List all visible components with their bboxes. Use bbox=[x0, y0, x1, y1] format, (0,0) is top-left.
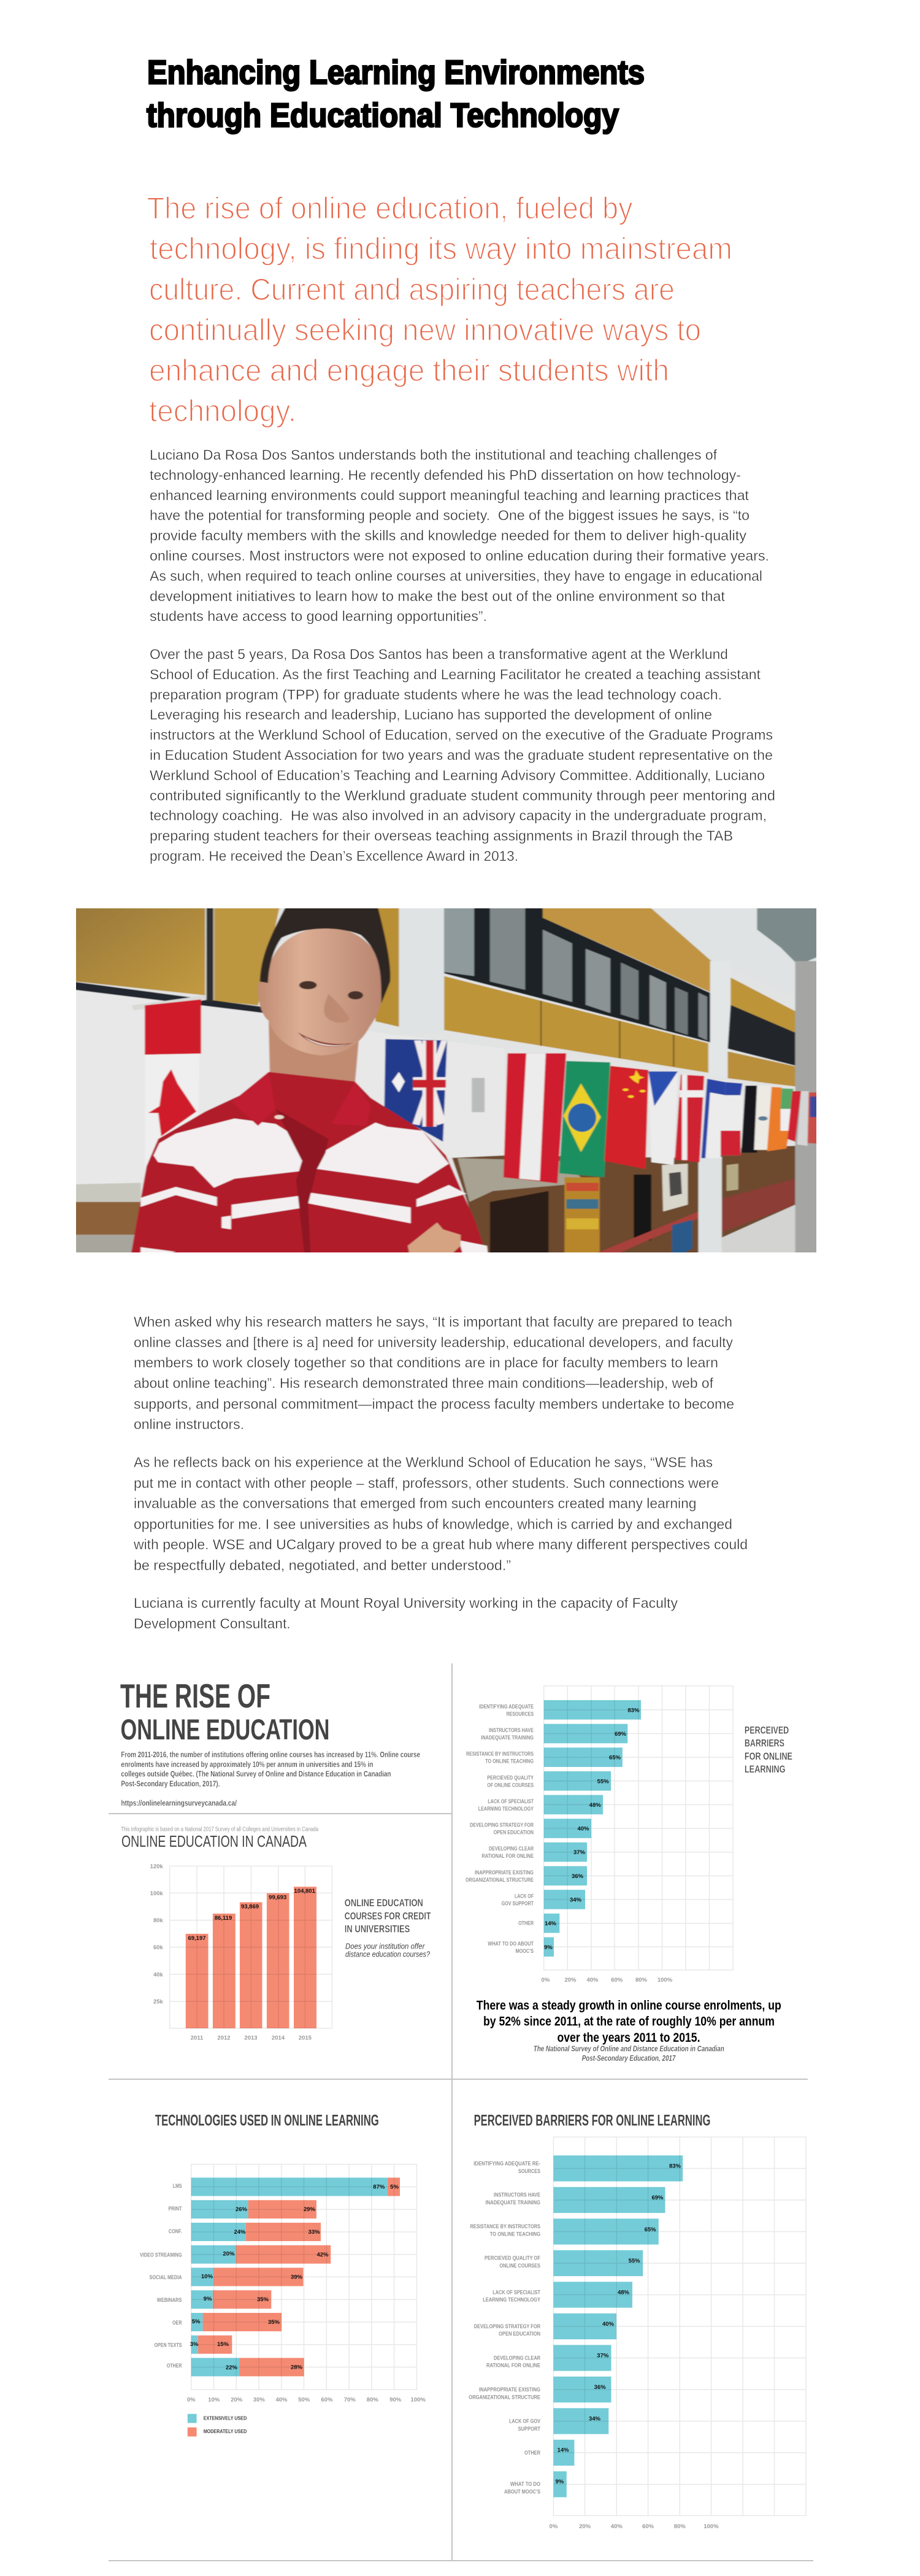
stacked bar chart: technologies: LMS bbox=[173, 2183, 182, 2189]
bar chart: perceived barriers: MOOC’S bbox=[515, 1948, 534, 1954]
body paragraph: why research matters: supports, and personal commitment—impact the process faculty members undertake to become bbox=[134, 1396, 734, 1412]
stacked bar chart: technologies: 20% bbox=[231, 2396, 243, 2403]
stacked bar chart: technologies: 70% bbox=[344, 2396, 356, 2403]
bar chart: perceived barriers: 14% bbox=[545, 1920, 557, 1927]
stacked bar chart: technologies: 26% bbox=[236, 2206, 248, 2213]
bar chart: perceived barriers detail: 65% bbox=[645, 2226, 656, 2233]
panel: perceived barriers for online learning bbox=[469, 2112, 806, 2530]
panel: technologies used in online learning bbox=[140, 2112, 426, 2436]
body paragraph: past five years: School of Education. As the first Teaching and Learning Facilitator he created a teaching assistant bbox=[150, 666, 761, 682]
bar chart: perceived barriers detail: INADEQUATE TRAINING bbox=[486, 2199, 540, 2206]
man: shirt bbox=[130, 1072, 488, 1259]
bar chart: courses by year bbox=[150, 1863, 332, 2042]
bar chart: courses by year: 86,119 bbox=[215, 1915, 232, 1922]
bar chart: perceived barriers: 60% bbox=[611, 1977, 623, 1984]
lede paragraph: The rise of online education, fueled by bbox=[147, 191, 633, 226]
flag: China bbox=[604, 1066, 648, 1169]
bar chart: perceived barriers detail: 36% bbox=[594, 2384, 606, 2391]
body paragraph: why research matters: online classes and [there is a] need for university leadership, educational developers, and faculty bbox=[134, 1335, 733, 1351]
bar chart: perceived barriers: 36% bbox=[572, 1873, 584, 1880]
bar chart: perceived barriers: TO ONLINE TEACHING bbox=[485, 1758, 534, 1765]
man: neck bbox=[269, 1021, 359, 1147]
bar chart: perceived barriers: LACK OF bbox=[515, 1893, 534, 1899]
body paragraph: reflections: put me in contact with other people – staff, professors, other students. Such connections were bbox=[134, 1475, 719, 1491]
bar chart: courses by year: 93,869 bbox=[241, 1904, 259, 1910]
body paragraph: past five years: Over the past 5 years, Da Rosa Dos Santos has been a transformative agent at the Werklund bbox=[150, 646, 728, 662]
bar chart: perceived barriers detail: 34% bbox=[589, 2415, 601, 2422]
stacked bar chart: technologies: 9% bbox=[204, 2296, 212, 2302]
chart caption: BARRIERS bbox=[745, 1738, 784, 1749]
body paragraph: why research matters: When asked why his research matters he says, “It is important that faculty are prepared to teach bbox=[134, 1314, 732, 1330]
bar chart: perceived barriers: 100% bbox=[657, 1977, 673, 1984]
bar chart: courses by year: 2014 bbox=[272, 2035, 285, 2042]
body paragraph: past five years: instructors at the Werklund School of Education, served on the executive of the Graduate Programs bbox=[150, 727, 773, 743]
infographic intro text: https://onlinelearningsurveycanada.ca/ bbox=[121, 1799, 237, 1807]
bar chart: perceived barriers detail: RATIONAL FOR ONLINE bbox=[486, 2363, 540, 2369]
flag: dark bbox=[741, 1086, 760, 1152]
stacked bar chart: technologies: 50% bbox=[298, 2396, 310, 2403]
callout: enrolment growth: over the years 2011 to 2015. bbox=[557, 2031, 700, 2045]
bar chart: perceived barriers: IDENTIFYING ADEQUATE bbox=[479, 1703, 534, 1709]
body paragraph: introduction: provide faculty members with the skills and knowledge needed for them to deliver high-quality bbox=[150, 527, 747, 543]
bar chart: perceived barriers detail: RESISTANCE BY INSTRUCTORS bbox=[470, 2223, 540, 2229]
bar chart: courses by year: 100k bbox=[150, 1890, 164, 1897]
chart note: This infographic is based on a National 2017 Survey of all Colleges and Universities in Canada bbox=[121, 1826, 318, 1833]
chart caption: COURSES FOR CREDIT bbox=[345, 1910, 431, 1922]
bar chart: perceived barriers detail: 9% bbox=[555, 2478, 564, 2485]
bar chart: perceived barriers detail: 60% bbox=[642, 2523, 654, 2530]
bar chart: perceived barriers: 37% bbox=[573, 1849, 586, 1856]
body paragraph: past five years: preparing student teachers for their overseas teaching assignments in Brazil through the TAB bbox=[150, 828, 733, 844]
panel: online education in Canada bbox=[121, 1826, 431, 2042]
bar chart: perceived barriers: INSTRUCTORS HAVE bbox=[489, 1727, 534, 1733]
bar chart: perceived barriers detail: 40% bbox=[602, 2321, 615, 2328]
stacked bar chart: technologies: 5% bbox=[192, 2318, 201, 2325]
flag: India bbox=[754, 1086, 770, 1150]
bar chart: perceived barriers detail: 100% bbox=[703, 2523, 719, 2530]
bar chart: perceived barriers detail: 40% bbox=[611, 2523, 623, 2530]
bar chart: courses by year: 69,197 bbox=[188, 1935, 206, 1942]
bar chart: perceived barriers detail: 83% bbox=[669, 2163, 681, 2170]
body paragraph: current role bbox=[134, 1595, 678, 1631]
chart caption: PERCEIVED bbox=[745, 1725, 789, 1736]
title bbox=[147, 53, 645, 134]
body paragraph: reflections: with people. WSE and UCalgary proved to be a great hub where many different perspectives could bbox=[133, 1536, 748, 1552]
bar chart: perceived barriers detail: 20% bbox=[579, 2523, 591, 2530]
callout: enrolment growth: There was a steady growth in online course enrolments, up bbox=[477, 1999, 781, 2013]
infographic heading: ONLINE EDUCATION bbox=[120, 1713, 330, 1746]
bar chart: courses by year: 60k bbox=[153, 1944, 164, 1951]
stacked bar chart: technologies: OPEN TEXTS bbox=[155, 2342, 182, 2348]
stacked bar chart: technologies: 90% bbox=[389, 2396, 402, 2403]
chart caption: Does your institution offer bbox=[345, 1941, 425, 1950]
bar chart: perceived barriers detail bbox=[469, 2137, 806, 2530]
flag: Czech Republic bbox=[648, 1070, 678, 1165]
bar chart: perceived barriers: OF ONLINE COURSES bbox=[487, 1782, 534, 1788]
bar chart: perceived barriers: 55% bbox=[597, 1778, 609, 1785]
stacked bar chart: technologies: 100% bbox=[411, 2396, 426, 2403]
bar chart: perceived barriers detail: IDENTIFYING ADEQUATE RE- bbox=[473, 2161, 540, 2167]
bar chart: perceived barriers: 83% bbox=[627, 1707, 640, 1714]
bar chart: perceived barriers detail: INAPPROPRIATE EXISTING bbox=[479, 2386, 540, 2393]
body paragraph: introduction: have the potential for transforming people and society. One of the biggest issues he says, is “to bbox=[150, 507, 749, 523]
chart caption: IN UNIVERSITIES bbox=[345, 1923, 410, 1934]
body paragraph: introduction: technology-enhanced learning. He recently defended his PhD dissertation on how technology- bbox=[150, 467, 741, 483]
bar chart: perceived barriers: OPEN EDUCATION bbox=[494, 1830, 534, 1836]
bar chart: perceived barriers: ORGANIZATIONAL STRUCTURE bbox=[466, 1877, 534, 1883]
infographic intro text bbox=[121, 1750, 420, 1807]
flag: Ireland bbox=[767, 1087, 794, 1151]
body paragraph: current role: Development Consultant. bbox=[134, 1616, 291, 1631]
chart caption: distance education courses? bbox=[345, 1949, 431, 1958]
bar chart: courses by year: 104,801 bbox=[294, 1888, 316, 1895]
bar chart: perceived barriers: LACK OF SPECIALIST bbox=[488, 1798, 534, 1804]
callout: enrolment growth bbox=[477, 1999, 781, 2063]
callout: enrolment growth: by 52% since 2011, at the rate of roughly 10% per annum bbox=[483, 2015, 775, 2029]
bar chart: perceived barriers detail: 14% bbox=[558, 2447, 569, 2453]
body paragraph: introduction bbox=[150, 447, 769, 624]
stacked bar chart: technologies: 20% bbox=[223, 2251, 235, 2257]
stacked bar chart: technologies: 5% bbox=[390, 2183, 399, 2190]
bar chart: courses by year: 40k bbox=[153, 1971, 164, 1979]
bar chart: perceived barriers: 48% bbox=[589, 1802, 601, 1809]
bar chart: perceived barriers detail: LACK OF GOV bbox=[509, 2418, 540, 2424]
stacked bar chart: technologies: 60% bbox=[321, 2396, 333, 2403]
stacked bar chart: technologies: 29% bbox=[304, 2206, 316, 2213]
chart caption bbox=[745, 1725, 792, 1775]
bar chart: courses by year: 80k bbox=[153, 1917, 164, 1924]
stacked bar chart: technologies: CONF. bbox=[169, 2228, 182, 2234]
man: head bbox=[258, 898, 391, 1056]
bar chart: perceived barriers detail: SUPPORT bbox=[518, 2426, 540, 2432]
bar chart: perceived barriers: 40% bbox=[577, 1826, 589, 1833]
stacked bar chart: technologies: 40% bbox=[275, 2396, 288, 2403]
stacked bar chart: technologies: VIDEO STREAMING bbox=[140, 2252, 182, 2258]
stacked bar chart: technologies: 10% bbox=[201, 2273, 213, 2280]
body paragraph: introduction: development initiatives to learn how to make the best out of the online environment so that bbox=[150, 588, 726, 604]
title: through Educational Technology bbox=[147, 96, 619, 134]
infographic intro text: Post-Secondary Education, 2017). bbox=[121, 1780, 220, 1788]
bar chart: perceived barriers: DEVELOPING STRATEGY FOR bbox=[470, 1822, 534, 1828]
lede paragraph: enhance and engage their students with bbox=[149, 353, 669, 388]
bar chart: perceived barriers: PERCIEVED QUALITY bbox=[487, 1774, 534, 1781]
body paragraph: introduction: online courses. Most instructors were not exposed to online education during their formative years. bbox=[150, 548, 769, 564]
callout: enrolment growth: Post-Secondary Education, 2017 bbox=[582, 2054, 676, 2063]
body paragraph: introduction: enhanced learning environments could support meaningful teaching and learning practices that bbox=[150, 487, 749, 503]
bar chart: courses by year: 120k bbox=[150, 1863, 164, 1870]
bar chart: perceived barriers: 40% bbox=[586, 1977, 599, 1984]
bar chart: perceived barriers: 69% bbox=[615, 1731, 627, 1738]
bar chart: courses by year: 2015 bbox=[299, 2035, 312, 2042]
body paragraph: past five years: preparation program (TPP) for graduate students where he was the lead technology coach. bbox=[150, 686, 722, 702]
title: Enhancing Learning Environments bbox=[147, 53, 645, 91]
body paragraph: why research matters bbox=[134, 1314, 734, 1432]
legend bbox=[188, 2414, 247, 2436]
infographic intro text: colleges outside Québec. (The National Survey of Online and Distance Education in Canadian bbox=[121, 1770, 391, 1779]
body paragraph: current role: Luciana is currently faculty at Mount Royal University working in the capacity of Faculty bbox=[134, 1595, 678, 1611]
body paragraph: reflections: be respectfully debated, negotiated, and better understood.” bbox=[134, 1557, 511, 1573]
chart caption: FOR ONLINE bbox=[745, 1750, 792, 1762]
bar chart: perceived barriers: LEARNING TECHNOLOGY bbox=[478, 1806, 534, 1812]
bar chart: courses by year: 2013 bbox=[244, 2035, 258, 2042]
bar chart: perceived barriers: 65% bbox=[609, 1755, 621, 1761]
bar chart: perceived barriers: RESOURCES bbox=[507, 1711, 534, 1717]
flag: Australia bbox=[385, 1039, 447, 1142]
flag: Brazil bbox=[559, 1061, 610, 1178]
bar chart: perceived barriers detail: 80% bbox=[674, 2523, 686, 2530]
bar chart: perceived barriers: 34% bbox=[570, 1896, 582, 1904]
infographic intro text: enrolments have increased by approximately 10% per annum in universities and 15% in bbox=[121, 1760, 373, 1769]
bar chart: perceived barriers: RESISTANCE BY INSTRUCTORS bbox=[466, 1751, 534, 1757]
bar chart: perceived barriers: 0% bbox=[542, 1977, 550, 1984]
body paragraph: why research matters: about online teaching”. His research demonstrated three main conditions—leadership, web of bbox=[134, 1375, 714, 1391]
bar chart: perceived barriers detail: DEVELOPING STRATEGY FOR bbox=[474, 2323, 540, 2329]
bar chart: perceived barriers: RATIONAL FOR ONLINE bbox=[481, 1853, 534, 1859]
stacked bar chart: technologies: 30% bbox=[253, 2396, 265, 2403]
body paragraph: past five years: technology coaching. He was also involved in an advisory capacity in the undergraduate program, bbox=[150, 808, 767, 824]
bar chart: perceived barriers detail: 55% bbox=[629, 2258, 640, 2264]
stacked bar chart: technologies: 24% bbox=[234, 2229, 246, 2236]
bar chart: perceived barriers detail: ABOUT MOOC’S bbox=[504, 2488, 540, 2494]
bar chart: perceived barriers: INADEQUATE TRAINING bbox=[481, 1735, 534, 1741]
lede paragraph: culture. Current and aspiring teachers are bbox=[149, 272, 675, 307]
lede paragraph bbox=[147, 191, 732, 428]
body paragraph: reflections: As he reflects back on his experience at the Werklund School of Education he says, “WSE has bbox=[134, 1454, 713, 1470]
stacked bar chart: technologies: WEBINARS bbox=[157, 2297, 182, 2303]
body paragraph: past five years: Leveraging his research and leadership, Luciano has supported the development of online bbox=[150, 707, 712, 723]
body paragraph: reflections bbox=[133, 1454, 748, 1573]
stacked bar chart: technologies: 10% bbox=[208, 2396, 220, 2403]
bar chart: courses by year: 25k bbox=[153, 1998, 164, 2006]
stacked bar chart: technologies: 3% bbox=[190, 2341, 199, 2348]
bar chart: perceived barriers: DEVELOPING CLEAR bbox=[489, 1846, 534, 1852]
body paragraph: why research matters: members to work closely together so that conditions are in place for faculty members to learn bbox=[134, 1354, 718, 1370]
body paragraph: introduction: Luciano Da Rosa Dos Santos understands both the institutional and teaching challenges of bbox=[150, 447, 718, 462]
bar chart: perceived barriers detail: DEVELOPING CLEAR bbox=[494, 2355, 540, 2361]
bar chart: perceived barriers detail: TO ONLINE TEACHING bbox=[490, 2231, 540, 2237]
bar chart: perceived barriers: 80% bbox=[635, 1977, 648, 1984]
bar chart: perceived barriers detail: 37% bbox=[597, 2352, 609, 2359]
legend: EXTENSIVELY USED bbox=[204, 2415, 247, 2421]
body paragraph: why research matters: online instructors. bbox=[134, 1416, 244, 1432]
bar chart: perceived barriers: 9% bbox=[544, 1944, 553, 1951]
body paragraph: past five years bbox=[150, 646, 775, 864]
stacked bar chart: technologies: 22% bbox=[226, 2364, 238, 2371]
bar chart: perceived barriers detail: LACK OF SPECIALIST bbox=[493, 2289, 540, 2295]
stacked bar chart: technologies: PRINT bbox=[168, 2206, 182, 2212]
infographic heading bbox=[120, 1677, 330, 1746]
bar chart: perceived barriers detail: OTHER bbox=[524, 2450, 540, 2456]
bar chart: perceived barriers detail: 48% bbox=[618, 2289, 630, 2296]
chart caption bbox=[345, 1897, 431, 1958]
bar chart: perceived barriers: GOV SUPPORT bbox=[502, 1900, 534, 1906]
stacked bar chart: technologies: 80% bbox=[367, 2396, 378, 2403]
panel heading: TECHNOLOGIES USED IN ONLINE LEARNING bbox=[155, 2112, 379, 2129]
infographic intro text: From 2011-2016, the number of institutions offering online courses has increased by 11%. Online course bbox=[121, 1750, 420, 1759]
man: hand bbox=[408, 1222, 461, 1259]
stacked bar chart: technologies: 42% bbox=[316, 2252, 329, 2258]
stacked bar chart: technologies: OTHER bbox=[167, 2363, 182, 2369]
bar chart: perceived barriers detail: LEARNING TECHNOLOGY bbox=[483, 2297, 540, 2303]
bar chart: courses by year: 2012 bbox=[217, 2035, 231, 2042]
flag: Austria bbox=[504, 1053, 566, 1183]
stacked bar chart: technologies: 87% bbox=[373, 2183, 385, 2190]
bar chart: perceived barriers detail: 0% bbox=[550, 2523, 558, 2530]
infographic heading: THE RISE OF bbox=[120, 1677, 270, 1715]
body paragraph: introduction: students have access to good learning opportunities”. bbox=[150, 608, 487, 624]
body paragraph: past five years: program. He received the Dean’s Excellence Award in 2013. bbox=[150, 848, 518, 864]
chart caption: LEARNING bbox=[745, 1763, 785, 1775]
bar chart: courses by year: 99,693 bbox=[269, 1894, 286, 1901]
body paragraph: past five years: contributed significantly to the Werklund graduate student community through peer mentoring and bbox=[150, 788, 775, 803]
panel heading: PERCEIVED BARRIERS FOR ONLINE LEARNING bbox=[474, 2112, 710, 2129]
bar chart: perceived barriers detail: WHAT TO DO bbox=[510, 2481, 540, 2487]
bar chart: perceived barriers: INAPPROPRIATE EXISTING bbox=[475, 1869, 534, 1876]
stacked bar chart: technologies: 35% bbox=[257, 2296, 269, 2303]
lede paragraph: technology, is finding its way into mainstream bbox=[150, 232, 732, 266]
body paragraph: reflections: invaluable as the conversations that emerged from such encounters created many learning bbox=[134, 1495, 697, 1511]
body paragraph: past five years: in Education Student Association for two years and was the graduate student representative on the bbox=[150, 747, 773, 763]
bar chart: perceived barriers: 20% bbox=[564, 1977, 577, 1984]
bar chart: perceived barriers detail: ONLINE COURSES bbox=[499, 2263, 540, 2269]
bar chart: perceived barriers detail: INSTRUCTORS HAVE bbox=[494, 2192, 540, 2198]
stacked bar chart: technologies: OER bbox=[172, 2320, 182, 2326]
stacked bar chart: technologies: 39% bbox=[291, 2274, 303, 2280]
chart caption: ONLINE EDUCATION bbox=[345, 1897, 423, 1909]
lede paragraph: continually seeking new innovative ways to bbox=[149, 313, 701, 347]
bar chart: perceived barriers bbox=[466, 1686, 733, 1984]
body paragraph: past five years: Werklund School of Education’s Teaching and Learning Advisory Committee. Additionally, Luciano bbox=[150, 767, 765, 783]
stacked bar chart: technologies: 0% bbox=[187, 2396, 196, 2403]
stacked bar chart: technologies: 28% bbox=[291, 2364, 303, 2371]
bar chart: perceived barriers detail: OPEN EDUCATION bbox=[499, 2331, 540, 2337]
chart heading: ONLINE EDUCATION IN CANADA bbox=[121, 1832, 307, 1850]
body paragraph: reflections: opportunities for me. I see universities as hubs of knowledge, which is carried by and exchanged bbox=[134, 1516, 732, 1532]
flag: Denmark bbox=[675, 1075, 704, 1162]
flags: far right bbox=[788, 1091, 834, 1146]
panel: perceived barriers summary chart bbox=[466, 1686, 792, 2063]
bar chart: perceived barriers detail: ORGANIZATIONAL STRUCTURE bbox=[469, 2394, 540, 2400]
legend: MODERATELY USED bbox=[204, 2428, 247, 2434]
bar chart: courses by year: 2011 bbox=[191, 2035, 204, 2042]
bar chart: perceived barriers detail: 69% bbox=[651, 2195, 664, 2201]
lede paragraph: technology. bbox=[149, 394, 296, 428]
stacked bar chart: technologies bbox=[140, 2164, 426, 2403]
callout: enrolment growth: The National Survey of Online and Distance Education in Canadian bbox=[534, 2044, 724, 2053]
stacked bar chart: technologies: 35% bbox=[268, 2319, 280, 2326]
stacked bar chart: technologies: SOCIAL MEDIA bbox=[150, 2274, 182, 2280]
bar chart: perceived barriers detail: PERCIEVED QUALITY OF bbox=[485, 2255, 540, 2261]
photo: man in striped shirt in front of flags bbox=[76, 908, 816, 1252]
flag: red white blue bbox=[701, 1079, 742, 1158]
body paragraph: introduction: As such, when required to teach online courses at universities, they have to engage in educational bbox=[150, 568, 762, 584]
stacked bar chart: technologies: 33% bbox=[308, 2229, 320, 2236]
bar chart: perceived barriers: OTHER bbox=[518, 1920, 534, 1926]
flag: Canada bbox=[132, 995, 206, 1180]
bar chart: perceived barriers detail: SOURCES bbox=[518, 2168, 540, 2174]
bar chart: perceived barriers: WHAT TO DO ABOUT bbox=[488, 1941, 534, 1947]
stacked bar chart: technologies: 15% bbox=[217, 2341, 229, 2348]
